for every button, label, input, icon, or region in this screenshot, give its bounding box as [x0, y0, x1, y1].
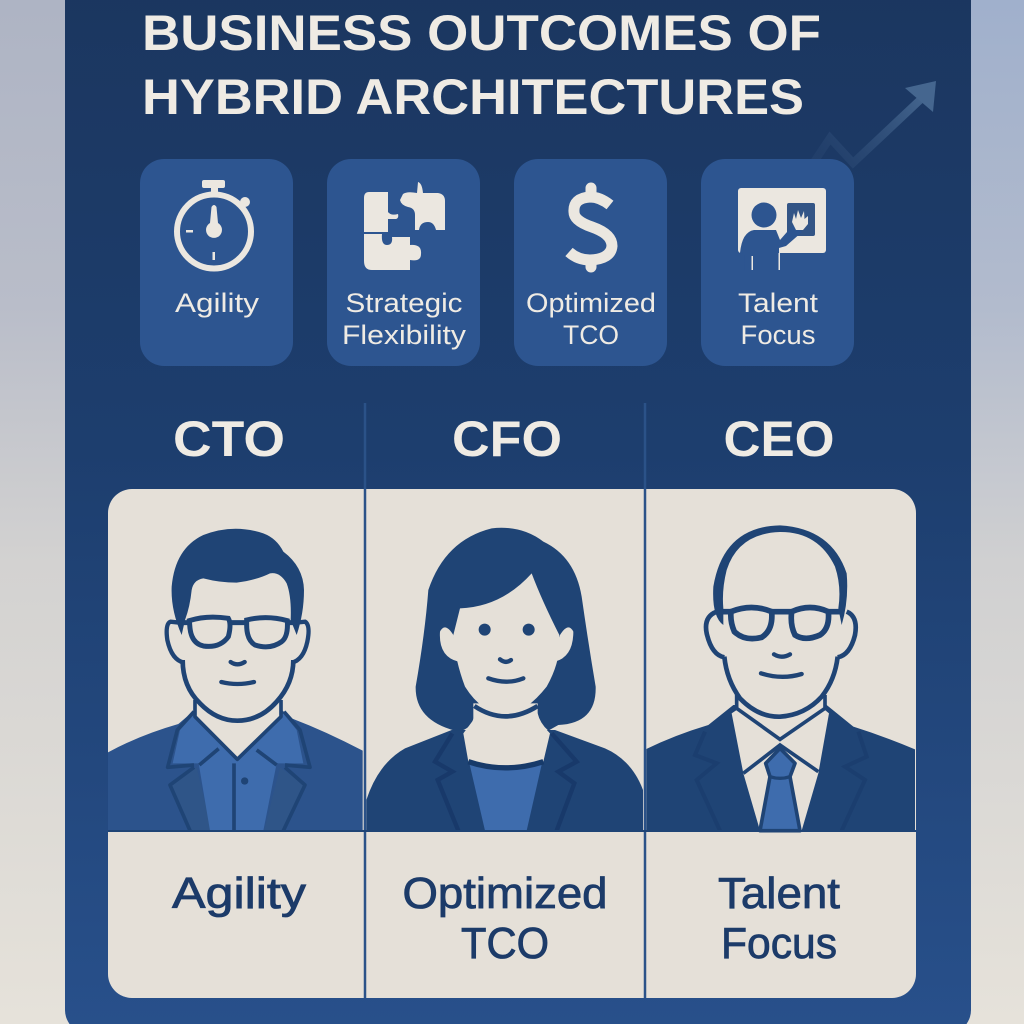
CTO ears [167, 622, 309, 663]
CEO jacket [646, 705, 915, 831]
CFO face [453, 573, 560, 714]
outcome: Optimized TCO: Optimized [402, 869, 608, 918]
label: Talent Focus [738, 288, 819, 350]
CTO face [183, 600, 293, 721]
label: Strategic Flexibility: Strategic [346, 288, 462, 318]
persona: CTO [108, 529, 363, 831]
label: Strategic Flexibility: Flexibility [342, 320, 467, 350]
CEO ears [706, 612, 856, 657]
CEO glasses [720, 607, 840, 639]
persona: CEO [646, 525, 915, 831]
icon: dollar sign [569, 188, 612, 267]
icon: presenter at board [738, 188, 826, 271]
icon: puzzle pieces [364, 182, 445, 270]
card: Agility [140, 159, 293, 366]
heading: CEO: CEO [724, 411, 834, 467]
CFO chin line [474, 706, 538, 716]
outcome: Agility: Agility [172, 869, 306, 918]
icon: stopwatch [177, 180, 251, 268]
CEO nose and mouth [761, 654, 802, 677]
CFO top [469, 762, 542, 831]
label: Optimized TCO: TCO [563, 320, 619, 350]
cream persona card [108, 489, 916, 998]
CEO shirt and neck [732, 697, 829, 831]
outcome: Optimized TCO: TCO [461, 919, 549, 968]
card: Strategic Flexibility [327, 159, 480, 366]
CTO lapel shading [172, 767, 304, 831]
CEO collar lines [737, 695, 825, 773]
label: Agility: Agility [175, 288, 260, 318]
title [142, 5, 821, 125]
CEO tie [760, 748, 800, 831]
label: Optimized TCO [526, 288, 656, 350]
title: HYBRID ARCHITECTURES [142, 69, 804, 125]
CFO jacket [366, 730, 643, 831]
icon: growth arrow [812, 81, 936, 165]
card: Talent Focus [701, 159, 854, 366]
label: Talent Focus: Focus [740, 320, 816, 350]
label: Optimized TCO: Optimized [526, 288, 656, 318]
CFO eyes [479, 624, 491, 636]
heading: CTO: CTO [173, 411, 285, 467]
CTO lapels and collar lines [168, 700, 310, 831]
label: Talent Focus: Talent [738, 288, 819, 318]
outcome: Talent Focus: Focus [721, 919, 837, 968]
label: Strategic Flexibility [342, 288, 467, 350]
card: Optimized TCO [514, 159, 667, 366]
CTO nose and mouth [221, 662, 254, 684]
outcome: Talent Focus: Talent [718, 869, 840, 918]
CFO lapels [435, 733, 577, 831]
outcome: Optimized TCO [402, 869, 608, 968]
CFO nose and mouth [488, 659, 523, 682]
title: BUSINESS OUTCOMES OF [142, 5, 821, 61]
CFO hair [416, 528, 596, 731]
CTO glasses [180, 617, 297, 647]
CTO neck [196, 697, 280, 759]
CEO hair outline [713, 525, 847, 625]
heading: CFO: CFO [452, 411, 562, 467]
outcome: Talent Focus [718, 869, 840, 968]
persona: CFO [366, 528, 643, 831]
CTO hair [172, 529, 304, 635]
CTO shirt [173, 713, 303, 831]
CEO head [723, 529, 838, 717]
CTO jacket [108, 708, 363, 831]
column dividers [365, 403, 645, 998]
CFO neck [463, 703, 550, 767]
CFO ears [440, 627, 573, 662]
